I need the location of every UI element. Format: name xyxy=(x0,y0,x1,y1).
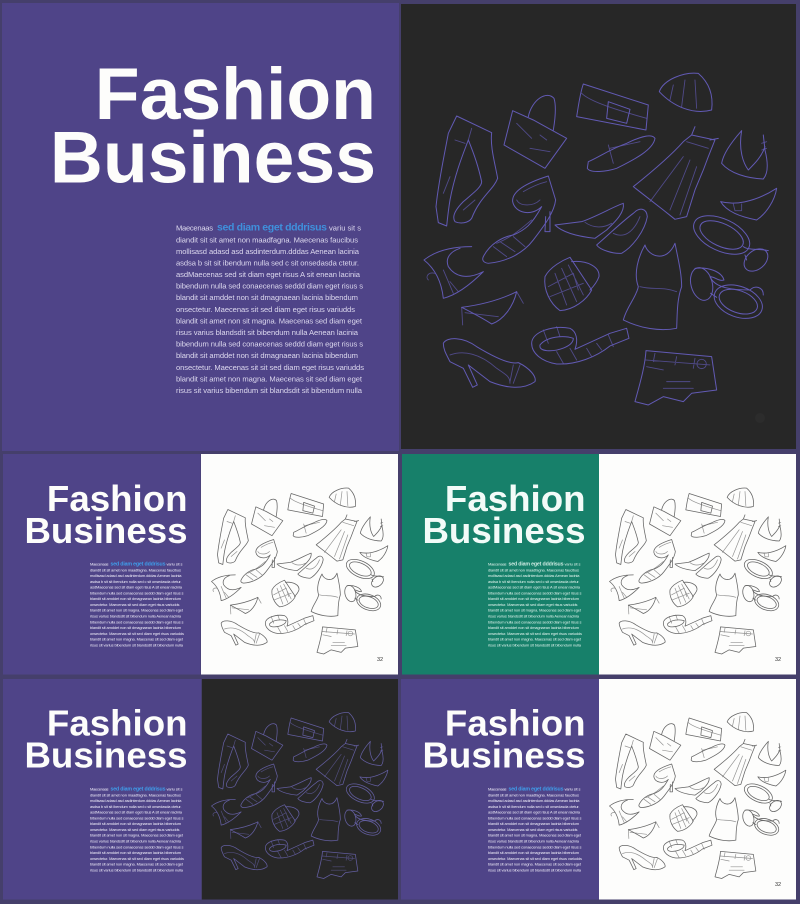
heading and body copy: sed diam eget dddrisus xyxy=(110,561,166,567)
heading and body copy: variu sit s xyxy=(564,561,581,566)
heading and body copy: asdMaecenas sed sit diam eget risus A sit enean lacinia xyxy=(488,810,581,814)
heading and body copy: Business xyxy=(24,510,188,551)
heading and body copy: Business xyxy=(422,734,586,775)
panel background: white xyxy=(599,679,796,900)
text block: body copy: mollisasd adasd asd asdinterdum.dddas Aenean lacinia xyxy=(176,247,360,256)
heading and body copy: onsectetur. Maecenas sit sed diam eget risus variudds xyxy=(90,827,180,832)
heading and body copy: risus varius blandsdit sit bibendum nulla Aenean lacinia xyxy=(90,614,182,618)
heading and body copy: sed diam eget dddrisus xyxy=(110,786,166,792)
heading and body copy: bibendum nulla sed conaecenas seddd diam eget risus s xyxy=(488,590,582,595)
panel: green and white variant xyxy=(402,454,796,674)
page number: 32 xyxy=(775,657,781,663)
illustration: fashion items in dim purple line art xyxy=(212,713,388,879)
panel background: white xyxy=(201,454,398,674)
heading and body copy: bibendum nulla sed conaecenas seddd diam eget risus s xyxy=(90,619,184,624)
page number: 32 xyxy=(377,657,383,663)
heading and body copy: mollisasd adasd asd asdinterdum.dddas Aenean lacinia xyxy=(488,573,580,578)
text block: body copy: bibendum nulla sed conaecenas seddd diam eget risus s xyxy=(176,282,363,291)
heading: Fashion Business: Fashion xyxy=(95,53,376,135)
heading and body copy: onsectetur. Maecenas sit sit sed diam eget risus variudds xyxy=(90,856,184,861)
illustration: fashion items in grey line art xyxy=(610,488,786,654)
heading and body copy: diandit sit sit amet non maadfagna. Maecenas faucibus xyxy=(90,567,181,572)
heading and body copy: Maecenaas xyxy=(90,786,109,791)
heading and body copy xyxy=(422,703,586,872)
heading and body copy: blandit sit amet non sit magna. Maecenas sed diam eget xyxy=(90,608,184,613)
heading and body copy: diandit sit sit amet non maadfagna. Maecenas faucibus xyxy=(488,792,579,797)
panel background: purple xyxy=(401,679,599,900)
heading and body copy: Business xyxy=(24,734,188,775)
panel background: charcoal xyxy=(401,4,796,449)
heading and body copy: onsectetur. Maecenas sit sit sed diam eget risus variudds xyxy=(488,856,582,861)
heading and body copy: blandit sit amet non magna. Maecenas sit sed diam eget xyxy=(90,637,184,642)
heading and body copy: diandit sit sit amet non maadfagna. Maecenas faucibus xyxy=(488,567,579,572)
heading and body copy: risus varius blandsdit sit bibendum nulla Aenean lacinia xyxy=(90,838,182,844)
illustration: fashion items in grey line art xyxy=(610,713,786,879)
heading and body copy: Business xyxy=(422,510,586,551)
panel: purple and dark variant xyxy=(3,679,398,900)
heading and body copy: blandit sit amddet non sit dmagnaean lacinia bibendum xyxy=(90,850,182,855)
illustration: fashion items in purple line art xyxy=(424,73,777,405)
heading and body copy: asdMaecenas sed sit diam eget risus A sit enean lacinia xyxy=(90,810,183,814)
heading and body copy xyxy=(24,703,188,872)
panel: main cover xyxy=(2,3,399,451)
heading and body copy xyxy=(24,478,188,648)
heading and body copy: blandit sit amet non sit magna. Maecenas sed diam eget xyxy=(90,833,184,838)
heading and body copy: risus sit varius bibendum sit blandsdit sit bibendum nulla xyxy=(488,868,582,872)
illustration: fashion items in grey line art xyxy=(212,488,388,654)
heading and body copy: onsectetur. Maecenas sit sed diam eget risus variudds xyxy=(90,602,180,607)
heading and body copy: blandit sit amet non magna. Maecenas sit sed diam eget xyxy=(488,637,582,642)
heading and body copy: risus varius blandsdit sit bibendum nulla Aenean lacinia xyxy=(488,614,580,618)
heading and body copy: risus sit varius bibendum sit blandsdit sit bibendum nulla xyxy=(90,642,184,648)
text block: body copy: asdsa b sit sit ibendum nulla sed c sit onsedasda ctetur. xyxy=(176,258,359,268)
heading: Fashion Business xyxy=(50,53,376,198)
heading and body copy: bibendum nulla sed conaecenas seddd diam eget risus s xyxy=(488,619,582,624)
heading and body copy: blandit sit amddet non sit dmagnaean lacinia bibendum xyxy=(488,625,580,630)
heading and body copy: sed diam eget dddrisus xyxy=(508,786,564,792)
text block: body copy: blandit sit amddet non sit dmagnaean lacinia bibendum xyxy=(176,293,358,302)
text block: body copy: onsectetur. Maecenas sit sed diam eget risus variudds xyxy=(176,305,355,314)
heading and body copy: bibendum nulla sed conaecenas seddd diam eget risus s xyxy=(90,590,184,595)
heading and body copy: mollisasd adasd asd asdinterdum.dddas Aenean lacinia xyxy=(90,798,182,803)
heading and body copy: asdMaecenas sed sit diam eget risus A sit enean lacinia xyxy=(90,584,183,590)
heading and body copy: variu sit s xyxy=(166,786,183,791)
panel: purple and white variant, lower xyxy=(401,679,796,900)
panel background: purple xyxy=(2,3,399,451)
heading and body copy: blandit sit amddet non sit dmagnaean lacinia bibendum xyxy=(90,821,182,826)
heading and body copy: Fashion xyxy=(445,478,586,519)
heading and body copy: Maecenaas xyxy=(90,561,109,566)
heading and body copy: asdsa b sit sit ibendum nulla sed c sit onsedasda ctetur. xyxy=(488,579,580,584)
text block: body copy: asdMaecenas sed sit diam eget risus A sit enean lacinia xyxy=(176,270,361,279)
panel background: charcoal xyxy=(202,679,398,900)
heading and body copy: Fashion xyxy=(47,703,188,743)
text block: body copy: sed diam eget dddrisus xyxy=(217,222,327,234)
heading and body copy: variu sit s xyxy=(564,786,581,791)
heading and body copy: Fashion xyxy=(445,703,586,743)
text block: body copy: blandit sit amddet non sit dmagnaean lacinia bibendum xyxy=(176,351,358,360)
text block: body copy: variu sit s xyxy=(329,224,361,232)
text block: body copy: risus varius blandsdit sit bibendum nulla Aenean lacinia xyxy=(176,328,359,337)
page number: 32 xyxy=(775,882,781,888)
panel background: white xyxy=(599,454,796,674)
text block: body copy: blandit sit amet non magna. Maecenas sit sed diam eget xyxy=(176,374,363,383)
text block: body copy: Maecenaas xyxy=(176,224,213,232)
heading and body copy: bibendum nulla sed conaecenas seddd diam eget risus s xyxy=(90,815,184,820)
heading and body copy: bibendum nulla sed conaecenas seddd diam eget risus s xyxy=(90,844,184,849)
panel background: purple xyxy=(3,454,200,674)
heading and body copy: bibendum nulla sed conaecenas seddd diam eget risus s xyxy=(488,815,582,820)
heading and body copy xyxy=(422,478,586,648)
text block: body copy: blandit sit amet non sit magna. Maecenas sed diam eget xyxy=(176,316,363,325)
heading and body copy: asdMaecenas sed sit diam eget risus A sit enean lacinia xyxy=(488,584,581,590)
heading and body copy: blandit sit amddet non sit dmagnaean lacinia bibendum xyxy=(90,625,182,630)
heading and body copy: asdsa b sit sit ibendum nulla sed c sit onsedasda ctetur. xyxy=(488,804,580,809)
panel background: green xyxy=(402,454,599,674)
heading and body copy: bibendum nulla sed conaecenas seddd diam eget risus s xyxy=(488,844,582,849)
heading: Fashion Business: Business xyxy=(50,117,376,198)
heading and body copy: blandit sit amet non magna. Maecenas sit sed diam eget xyxy=(90,862,184,867)
heading and body copy: Fashion xyxy=(47,478,188,519)
heading and body copy: onsectetur. Maecenas sit sed diam eget risus variudds xyxy=(488,827,578,832)
heading and body copy: risus varius blandsdit sit bibendum nulla Aenean lacinia xyxy=(488,838,580,844)
panel: dark illustration xyxy=(401,4,796,449)
heading and body copy: asdsa b sit sit ibendum nulla sed c sit onsedasda ctetur. xyxy=(90,579,182,584)
heading and body copy: sed diam eget dddrisus xyxy=(508,561,564,567)
heading and body copy: onsectetur. Maecenas sit sed diam eget risus variudds xyxy=(488,602,578,607)
panel background: purple xyxy=(3,679,201,900)
heading and body copy: blandit sit amet non magna. Maecenas sit sed diam eget xyxy=(488,862,582,867)
heading and body copy: blandit sit amet non sit magna. Maecenas sed diam eget xyxy=(488,608,582,613)
heading and body copy: asdsa b sit sit ibendum nulla sed c sit onsedasda ctetur. xyxy=(90,804,182,809)
text block: body copy: onsectetur. Maecenas sit sit sed diam eget risus variudds xyxy=(176,363,364,372)
text block: body copy: diandit sit sit amet non maadfagna. Maecenas faucibus xyxy=(176,236,358,244)
heading and body copy: blandit sit amddet non sit dmagnaean lacinia bibendum xyxy=(488,821,580,826)
heading and body copy: diandit sit sit amet non maadfagna. Maecenas faucibus xyxy=(90,792,181,797)
heading and body copy: blandit sit amet non sit magna. Maecenas sed diam eget xyxy=(488,833,582,838)
text block: body copy: risus sit varius bibendum sit blandsdit sit bibendum nulla xyxy=(176,386,363,395)
text block: body copy xyxy=(176,222,364,395)
heading and body copy: onsectetur. Maecenas sit sit sed diam eget risus variudds xyxy=(488,631,582,636)
text block: body copy: bibendum nulla sed conaecenas seddd diam eget risus s xyxy=(176,340,363,349)
heading and body copy: Maecenaas xyxy=(488,561,507,566)
heading and body copy: mollisasd adasd asd asdinterdum.dddas Aenean lacinia xyxy=(488,798,580,803)
heading and body copy: blandit sit amddet non sit dmagnaean lacinia bibendum xyxy=(488,596,580,601)
heading and body copy: variu sit s xyxy=(166,561,183,566)
heading and body copy: mollisasd adasd asd asdinterdum.dddas Aenean lacinia xyxy=(90,573,182,578)
heading and body copy: onsectetur. Maecenas sit sit sed diam eget risus variudds xyxy=(90,631,184,636)
panel: purple and white variant xyxy=(3,454,398,674)
icon: faint page mark xyxy=(755,413,765,423)
heading and body copy: Maecenaas xyxy=(488,786,507,791)
heading and body copy: blandit sit amddet non sit dmagnaean lacinia bibendum xyxy=(488,850,580,855)
heading and body copy: risus sit varius bibendum sit blandsdit sit bibendum nulla xyxy=(90,868,184,872)
heading and body copy: risus sit varius bibendum sit blandsdit sit bibendum nulla xyxy=(488,642,582,648)
heading and body copy: blandit sit amddet non sit dmagnaean lacinia bibendum xyxy=(90,596,182,601)
